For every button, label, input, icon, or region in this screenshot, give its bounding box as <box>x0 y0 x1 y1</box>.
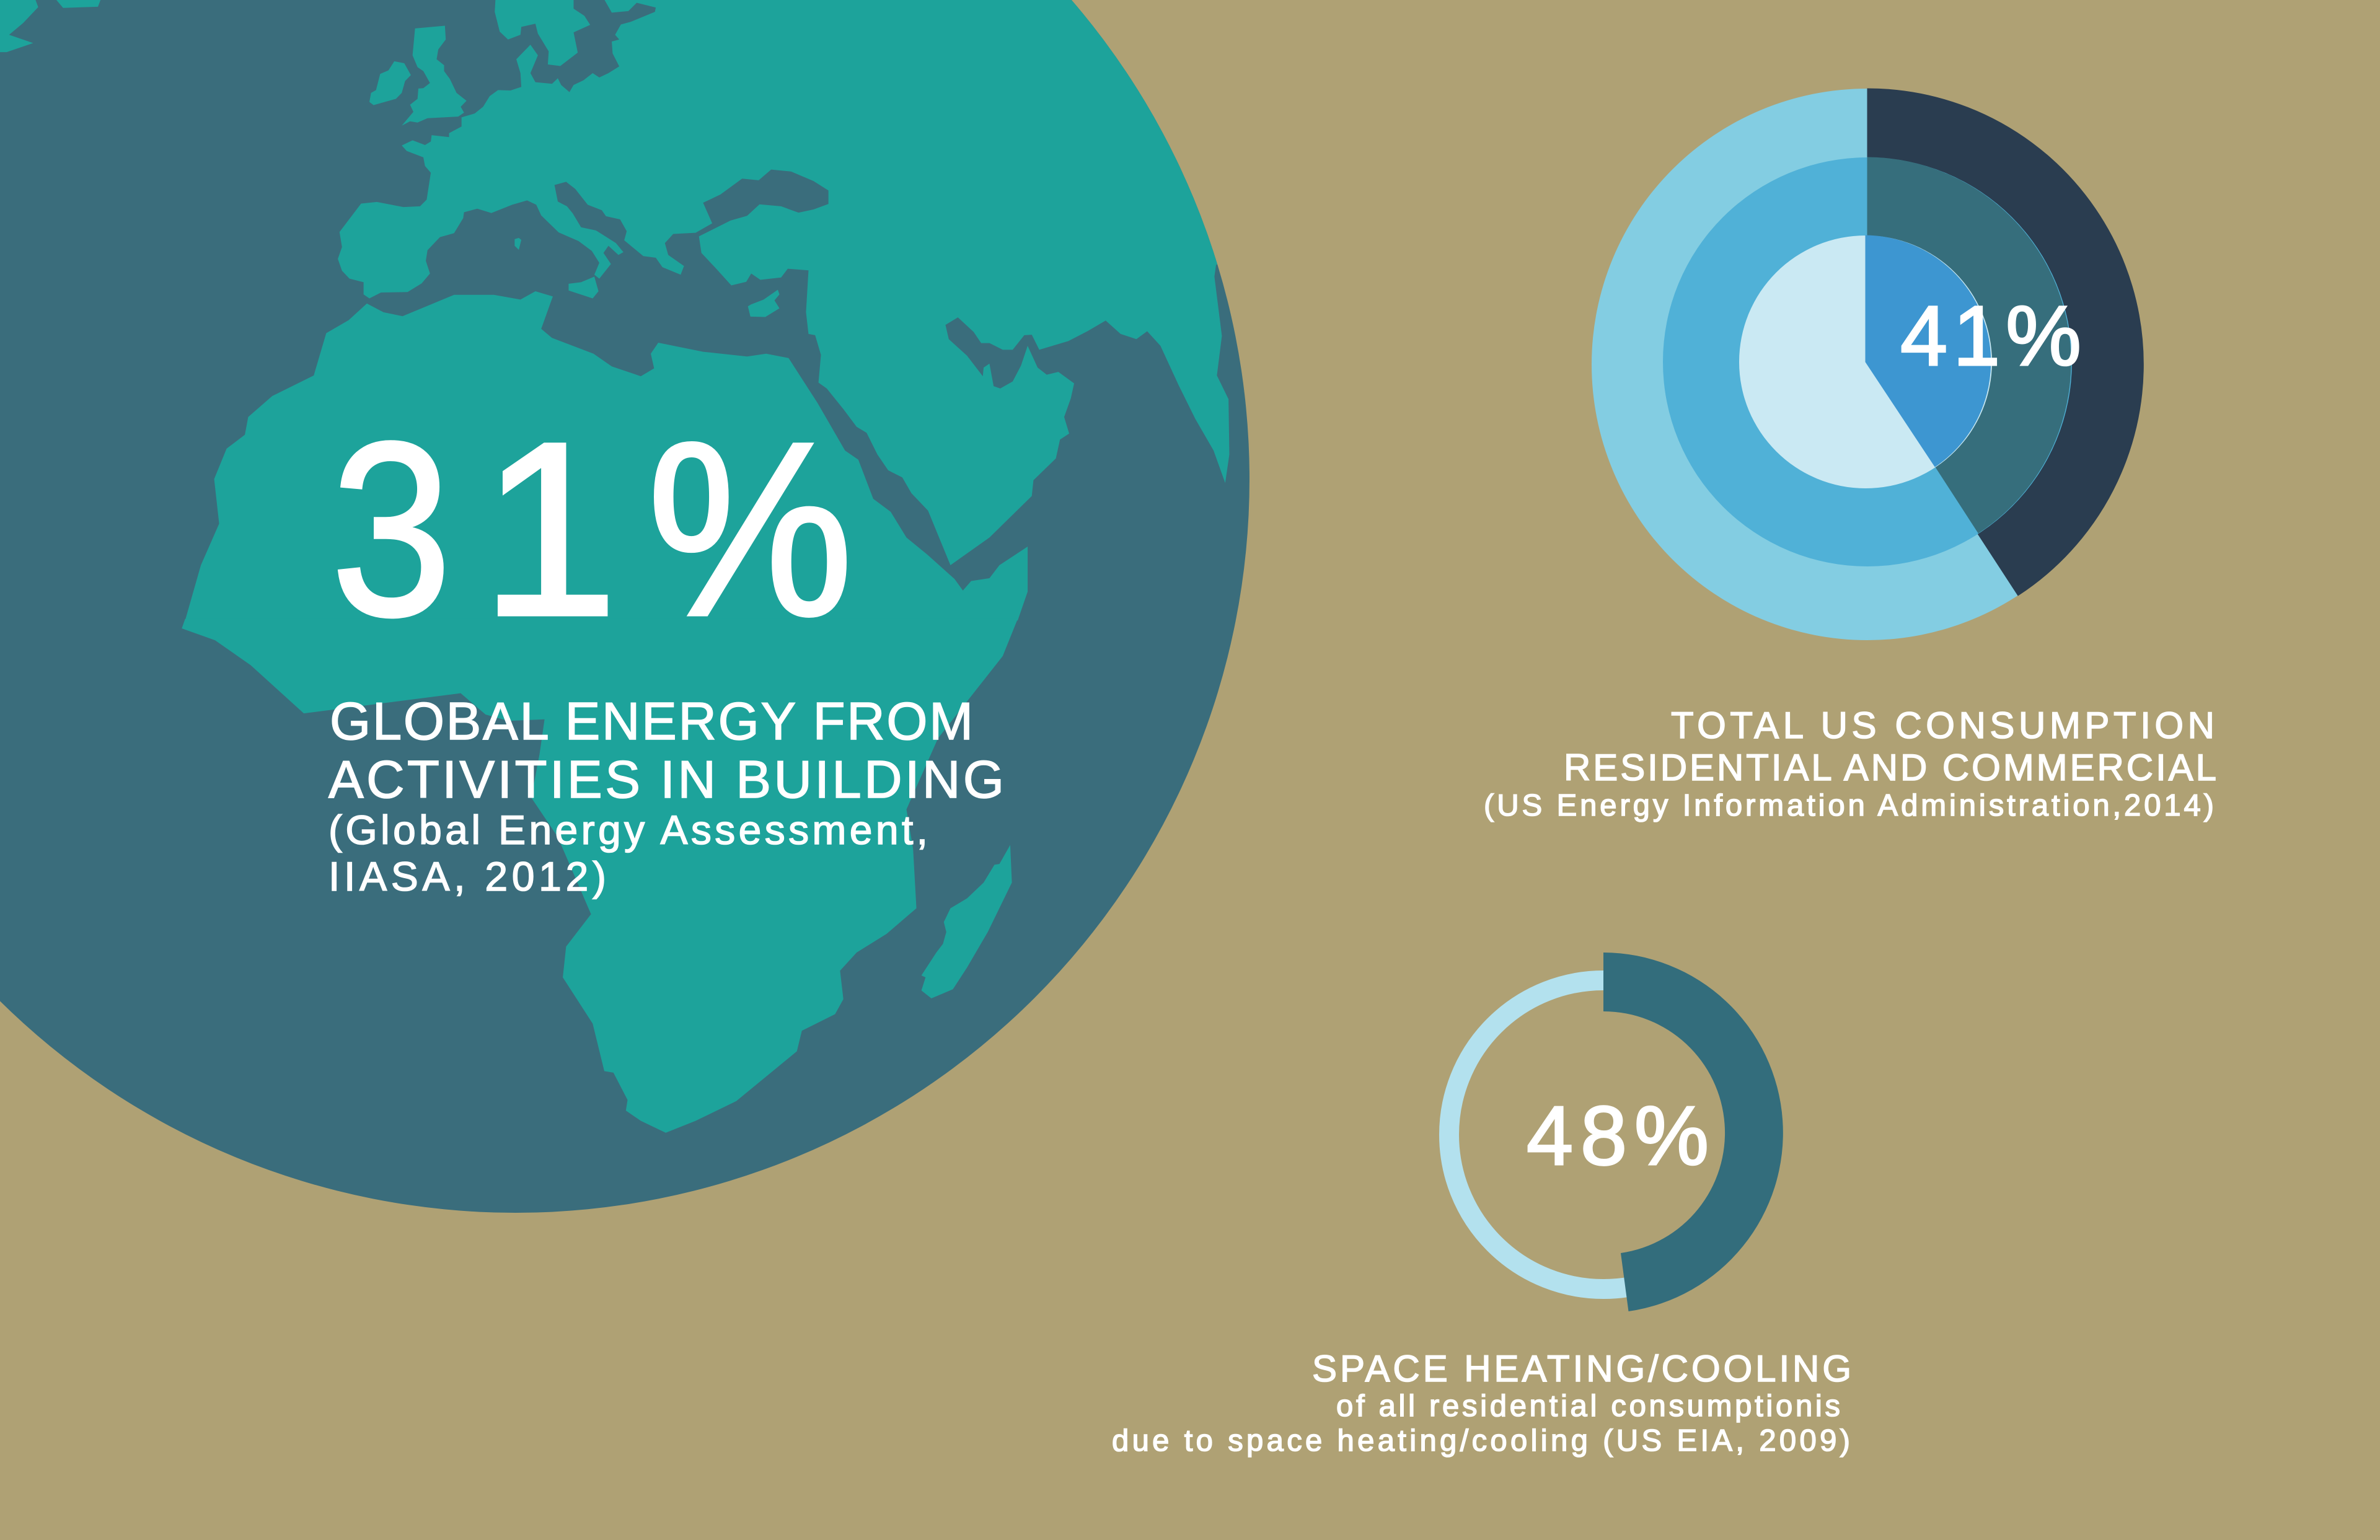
middle ring slice <box>1867 157 2071 533</box>
dark arc <box>1603 953 1783 1311</box>
outer ring slice <box>1867 89 2143 596</box>
heading line 2: RESIDENTIAL AND COMMERCIAL <box>1564 747 2216 788</box>
description line 2: due to space heating/cooling (US EIA, 2009) <box>1112 1424 1850 1458</box>
big stat: 31%: 3 <box>331 390 452 667</box>
heading line 1: GLOBAL ENERGY FROM <box>330 692 973 751</box>
stat: 48%: 48% <box>1527 1089 1709 1182</box>
inner circle slice <box>1866 235 1991 467</box>
source line: (US Energy Information Administration,2014) <box>1484 789 2214 822</box>
land: Scandinavia <box>495 0 590 66</box>
land: Europe and Asia <box>338 0 1328 565</box>
big stat: 31%: 1 <box>480 390 618 667</box>
ring chart: 48% <box>1449 953 1783 1311</box>
heading line 2: ACTIVITIES IN BUILDING <box>328 750 1004 809</box>
land: Ireland <box>369 61 411 105</box>
text block: space heating <box>1112 1348 1851 1458</box>
description line 1: of all residential consumptionis <box>1336 1389 1840 1423</box>
land: Great Britain <box>402 25 467 126</box>
land: North Africa <box>185 291 1028 620</box>
globe ocean <box>0 0 1250 1213</box>
globe <box>0 0 1328 1213</box>
source line 2: IIASA, 2012) <box>328 853 606 899</box>
inner circle base <box>1739 235 1992 488</box>
middle ring base <box>1663 157 2072 566</box>
land: Madagascar <box>922 845 1012 998</box>
land: Iceland <box>0 0 38 52</box>
land: Corsica <box>514 238 521 250</box>
outer ring base <box>1592 89 2143 640</box>
big stat: 31%: % <box>647 390 853 667</box>
text block: US consumption <box>1484 705 2216 822</box>
heading line 1: TOTAL US CONSUMPTION <box>1671 705 2215 746</box>
text block: global energy <box>328 692 1004 899</box>
light ring <box>1449 980 1758 1289</box>
stat: 41%: 41% <box>1900 289 2081 384</box>
land: Crete <box>748 289 780 317</box>
land: South Africa <box>182 619 1018 1133</box>
land: Greenland tip <box>55 0 101 8</box>
heading: SPACE HEATING/COOLING <box>1312 1348 1851 1389</box>
source line 1: (Global Energy Assessment, <box>328 807 928 853</box>
nested donut chart: 41% <box>1592 89 2143 640</box>
land masses <box>0 0 1328 1133</box>
land: Sicily <box>568 276 599 299</box>
